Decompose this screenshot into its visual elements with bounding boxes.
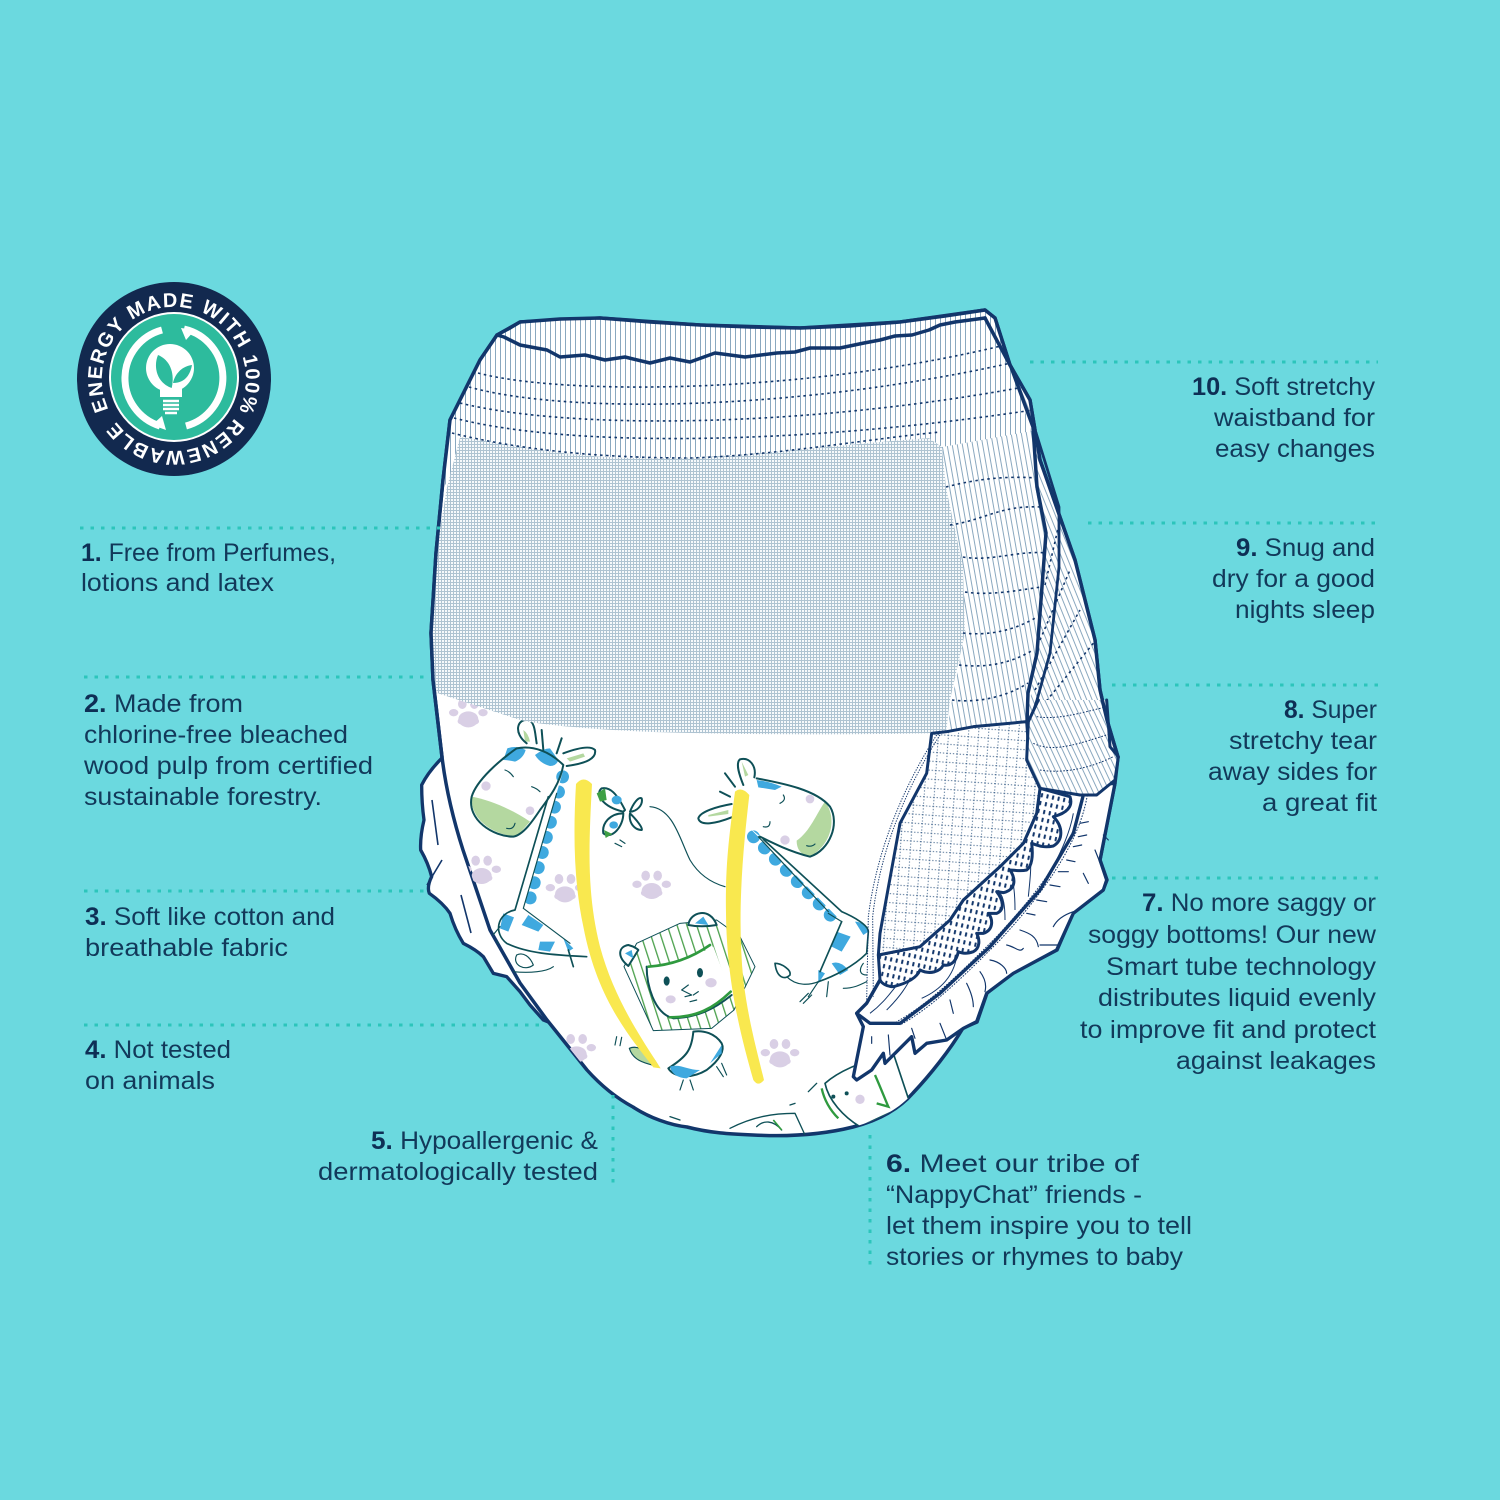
callout 9 [1212, 534, 1375, 624]
right outer ruffle [853, 783, 1115, 1080]
side edge seam [867, 735, 940, 1000]
diaper illustration [80, 310, 1378, 1271]
callout 4: 4. Not tested [85, 1036, 231, 1064]
callout 6 [886, 1150, 1192, 1271]
giraffe left [471, 720, 595, 972]
callout 7: Smart tube technology [1106, 953, 1377, 981]
side lobe, lattice panel and leg cuff [853, 700, 1118, 1080]
callout 10 [1192, 373, 1376, 463]
callout 7: to improve fit and protect [1080, 1016, 1376, 1044]
callout 9: 9. Snug and [1236, 534, 1375, 562]
callout 5: dermatologically tested [318, 1158, 598, 1186]
callout 5 [318, 1127, 598, 1186]
side waist lobe [1027, 700, 1118, 795]
callout 1 [81, 539, 336, 597]
callout 6: “NappyChat” friends - [886, 1181, 1142, 1209]
callout leader lines [80, 362, 1378, 1270]
callout 2: 2. Made from [84, 690, 243, 718]
callout 3 [85, 903, 335, 962]
callout 7: 7. No more saggy or [1142, 889, 1376, 917]
callout 2 [83, 690, 373, 811]
callout 10: 10. Soft stretchy [1192, 373, 1376, 401]
mesh absorbent panel [431, 437, 965, 734]
callout 8: away sides for [1208, 758, 1377, 786]
callout 9: dry for a good [1212, 565, 1375, 593]
waist front edge [497, 318, 985, 363]
paw prints [449, 699, 799, 1067]
printed characters [449, 699, 910, 1135]
diaper body [431, 310, 1118, 1136]
callout 2: wood pulp from certified [83, 752, 373, 780]
left leg ruffle [421, 758, 560, 1027]
callout 6: stories or rhymes to baby [886, 1243, 1184, 1271]
callout 8: a great fit [1262, 789, 1377, 817]
callout 8 [1208, 696, 1377, 817]
callout 7 [1080, 889, 1377, 1075]
callout 6: 6. Meet our tribe of [886, 1150, 1139, 1178]
callout 5: 5. Hypoallergenic & [371, 1127, 598, 1155]
callout 3: breathable fabric [85, 934, 288, 962]
badge: made with 100% renewable energy: ENERGY MADE WITH 100% RENEWABLE [88, 293, 260, 465]
side seams [985, 318, 1046, 722]
ruffle creases [872, 822, 1108, 1055]
callout 4 [85, 1036, 231, 1095]
callout 7: distributes liquid evenly [1098, 984, 1377, 1012]
callout 6: let them inspire you to tell [886, 1212, 1192, 1240]
callout 4: on animals [85, 1067, 215, 1095]
callout 3: 3. Soft like cotton and [85, 903, 335, 931]
callout 8: stretchy tear [1229, 727, 1377, 755]
bottom characters [670, 1053, 910, 1135]
callout 8: 8. Super [1284, 696, 1377, 724]
lattice panel [878, 722, 1040, 955]
scalloped dotted band [878, 788, 1071, 987]
callout 2: chlorine-free bleached [84, 721, 348, 749]
callout 1: 1. Free from Perfumes, [81, 539, 336, 567]
outer waist and hip outline [431, 310, 1118, 757]
giraffe right [698, 759, 868, 1003]
yellow stripes [574, 779, 661, 1068]
lion [615, 913, 755, 1090]
ruffle crease lines left [427, 800, 471, 933]
callout 10: waistband for [1213, 404, 1375, 432]
callout 7: against leakages [1176, 1047, 1376, 1075]
cuff dotted seam [897, 795, 1087, 1025]
callout 10: easy changes [1215, 435, 1375, 463]
butterfly [597, 788, 725, 887]
callout 1: lotions and latex [81, 569, 275, 597]
callout 2: sustainable forestry. [84, 783, 322, 811]
leg cuff [857, 788, 1083, 1023]
callout 9: nights sleep [1235, 596, 1375, 624]
waistband ribbing [443, 310, 1110, 740]
callout 7: soggy bottoms! Our new [1088, 921, 1377, 949]
